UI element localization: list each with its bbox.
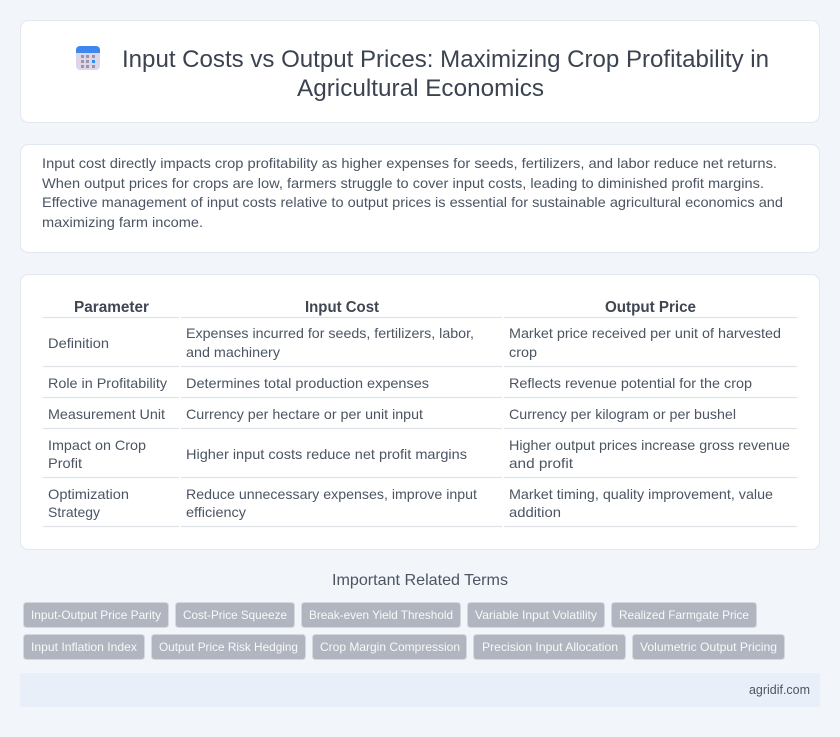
row: impact on crop profit: Profit: [48, 455, 82, 471]
table header: Output Price: [605, 299, 696, 316]
summary text: Input cost directly impacts crop profitability as higher expenses for seeds, fertilizers, and labor reduce net returns.: [42, 155, 777, 171]
table header: [74, 299, 696, 316]
icon: calendar: [76, 46, 100, 70]
related terms tags: Crop Margin Compression: [320, 640, 460, 654]
row: optimization strategy: addition: [509, 504, 561, 520]
row: definition: [48, 325, 781, 360]
row: impact on crop profit: Impact on Crop: [48, 437, 146, 453]
row: definition: and machinery: [186, 344, 280, 360]
summary panel: [20, 144, 820, 252]
row: impact on crop profit: Higher input costs reduce net profit margins: [186, 446, 467, 462]
row: impact on crop profit: and profit: [509, 455, 573, 471]
row: optimization strategy: [48, 486, 773, 520]
row: optimization strategy: Strategy: [48, 504, 100, 520]
row: optimization strategy: Market timing, quality improvement, value: [509, 486, 773, 502]
related terms heading: Important Related Terms: [332, 572, 508, 589]
related terms tags: Volumetric Output Pricing: [640, 640, 777, 654]
row: optimization strategy: Optimization: [48, 486, 129, 502]
row: optimization strategy: Reduce unnecessary expenses, improve input: [186, 486, 477, 502]
header panel: [20, 20, 820, 122]
related terms tags: Output Price Risk Hedging: [159, 640, 298, 654]
summary text: When output prices for crops are low, farmers struggle to cover input costs, leading to diminished profit margins.: [42, 175, 764, 191]
row: role in profitability: [48, 375, 752, 391]
row: optimization strategy: efficiency: [186, 504, 246, 520]
table header: Input Cost: [305, 299, 380, 316]
row: definition: Expenses incurred for seeds, fertilizers, labor,: [186, 325, 474, 341]
related terms tags: [24, 602, 784, 660]
related terms tags: Realized Farmgate Price: [619, 608, 749, 622]
related terms tags: Variable Input Volatility: [475, 608, 597, 622]
related terms tags: Precision Input Allocation: [482, 640, 618, 654]
row: measurement unit: Currency per kilogram or per bushel: [509, 406, 736, 422]
summary text: Effective management of input costs relative to output prices is essential for sustainable agricultural economics and: [42, 194, 783, 210]
title: Agricultural Economics: [297, 75, 544, 102]
footer bar: [20, 673, 820, 707]
related terms tags: Break-even Yield Threshold: [309, 608, 453, 622]
row: measurement unit: [48, 406, 736, 422]
row: role in profitability: Determines total production expenses: [186, 375, 429, 391]
related terms tags: Cost-Price Squeeze: [183, 608, 287, 622]
row: impact on crop profit: Higher output prices increase gross revenue: [509, 437, 790, 453]
row: role in profitability: Reflects revenue potential for the crop: [509, 375, 752, 391]
footer bar: agridif.com: [749, 683, 810, 697]
title: [122, 46, 769, 102]
row: impact on crop profit: [48, 437, 790, 471]
row: role in profitability: Role in Profitability: [48, 375, 167, 391]
summary text: maximizing farm income.: [42, 214, 203, 230]
title: Input Costs vs Output Prices: Maximizing Crop Profitability in: [122, 46, 769, 73]
row: measurement unit: Currency per hectare or per unit input: [186, 406, 423, 422]
row: definition: Market price received per unit of harvested: [509, 325, 781, 341]
summary text: [42, 155, 783, 230]
related terms tags: Input-Output Price Parity: [31, 608, 161, 622]
row: definition: crop: [509, 344, 537, 360]
row: definition: Definition: [48, 335, 109, 351]
comparison table panel: [20, 274, 820, 550]
related terms tags: Input Inflation Index: [31, 640, 137, 654]
row: measurement unit: Measurement Unit: [48, 406, 165, 422]
table header: Parameter: [74, 299, 149, 316]
